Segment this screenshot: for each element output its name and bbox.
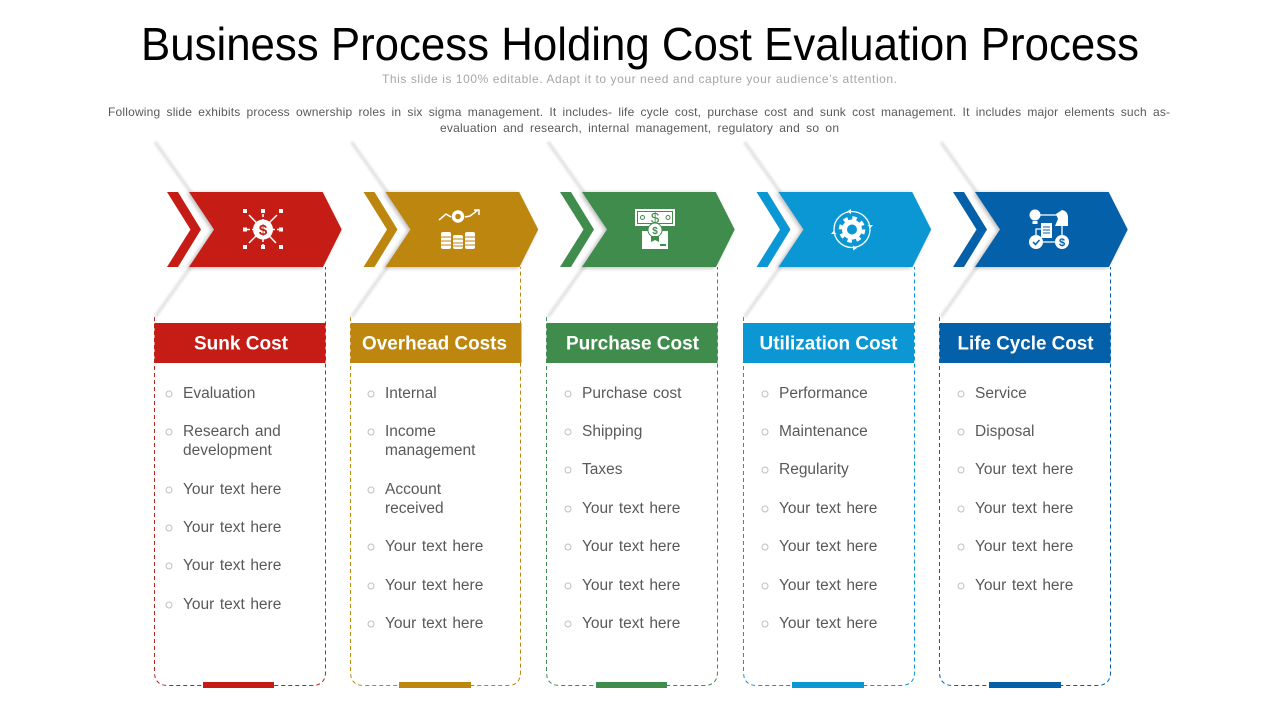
list: Life Cycle Cost items: Your text here bbox=[975, 538, 1073, 555]
list: Sunk Cost items: Evaluation bbox=[183, 385, 255, 402]
list: Purchase Cost items: Taxes bbox=[582, 461, 623, 478]
list: Purchase Cost items bbox=[565, 385, 682, 632]
subtitle: This slide is 100% editable. Adapt it to your need and capture your audience’s attention. bbox=[382, 72, 897, 86]
icon: banknote and box: $ bbox=[651, 210, 660, 227]
list: Utilization Cost items: Your text here bbox=[779, 577, 877, 594]
list: Purchase Cost items: Your text here bbox=[582, 500, 680, 517]
description bbox=[108, 105, 1170, 135]
list: Life Cycle Cost items: Your text here bbox=[975, 500, 1073, 517]
list: Overhead Costs items: management bbox=[385, 442, 476, 459]
header: Sunk Cost bbox=[154, 323, 326, 363]
icon: gear and coins bbox=[439, 210, 479, 249]
list: Purchase Cost items: Your text here bbox=[582, 577, 680, 594]
list: Overhead Costs items: Your text here bbox=[385, 538, 483, 555]
arrow banner bbox=[548, 142, 735, 317]
arrow banner bbox=[155, 142, 342, 317]
footer bar bbox=[203, 682, 274, 688]
list: Life Cycle Cost items: Your text here bbox=[975, 461, 1073, 478]
footer bar bbox=[792, 682, 864, 688]
arrow banner bbox=[352, 142, 538, 317]
list: Sunk Cost items bbox=[166, 385, 281, 613]
header: Utilization Cost: Utilization Cost bbox=[760, 334, 898, 354]
list: Overhead Costs items: Internal bbox=[385, 385, 437, 402]
list: Sunk Cost items: Your text here bbox=[183, 557, 281, 574]
list: Overhead Costs items: Account bbox=[385, 481, 442, 498]
dashed panel outline bbox=[546, 267, 718, 686]
icon: banknote and box: $ bbox=[652, 226, 658, 237]
list: Utilization Cost items: Your text here bbox=[779, 500, 877, 517]
list: Overhead Costs items: Your text here bbox=[385, 615, 483, 632]
header: Life Cycle Cost bbox=[940, 323, 1110, 363]
icon: banknote and box bbox=[635, 209, 675, 249]
description: Following slide exhibits process ownership roles in six sigma management. It includes- life cycle cost, purchase cost and sunk cost management. It includes major elements such as- bbox=[108, 105, 1170, 119]
arrow banner bbox=[941, 142, 1128, 317]
dashed panel outline bbox=[940, 267, 1110, 686]
list: Sunk Cost items: Your text here bbox=[183, 519, 281, 536]
icon: dollar network bbox=[243, 209, 283, 249]
list: Utilization Cost items: Regularity bbox=[779, 461, 849, 478]
header: Overhead Costs: Overhead Costs bbox=[362, 334, 507, 354]
icon: dollar network: $ bbox=[259, 222, 268, 239]
column: Life Cycle Cost bbox=[940, 142, 1128, 688]
list: Life Cycle Cost items: Service bbox=[975, 385, 1027, 402]
list: Overhead Costs items bbox=[368, 385, 483, 632]
list: Sunk Cost items: Your text here bbox=[183, 596, 281, 613]
list: Purchase Cost items: Your text here bbox=[582, 615, 680, 632]
column: Utilization Cost bbox=[743, 142, 931, 688]
footer bar bbox=[989, 682, 1061, 688]
footer bar bbox=[399, 682, 471, 688]
list: Utilization Cost items bbox=[762, 385, 877, 632]
list: Sunk Cost items: development bbox=[183, 442, 272, 459]
icon: gear cycle bbox=[831, 209, 873, 250]
description: evaluation and research, internal management, regulatory and so on bbox=[440, 121, 839, 135]
dashed panel outline bbox=[154, 267, 326, 686]
list: Purchase Cost items: Shipping bbox=[582, 423, 642, 440]
list: Sunk Cost items: Your text here bbox=[183, 481, 281, 498]
header: Utilization Cost bbox=[743, 323, 914, 363]
list: Life Cycle Cost items: Your text here bbox=[975, 577, 1073, 594]
header: Life Cycle Cost: Life Cycle Cost bbox=[958, 334, 1094, 354]
header: Purchase Cost bbox=[546, 323, 718, 363]
dashed panel outline bbox=[744, 267, 914, 686]
footer bar bbox=[596, 682, 667, 688]
list: Overhead Costs items: Income bbox=[385, 423, 436, 440]
header: Purchase Cost: Purchase Cost bbox=[566, 334, 700, 354]
list: Utilization Cost items: Performance bbox=[779, 385, 868, 402]
title: Business Process Holding Cost Evaluation Process bbox=[141, 18, 1139, 70]
list: Utilization Cost items: Your text here bbox=[779, 615, 877, 632]
list: Life Cycle Cost items bbox=[958, 385, 1073, 594]
column: Sunk Cost bbox=[154, 142, 342, 688]
list: Overhead Costs items: Your text here bbox=[385, 577, 483, 594]
list: Purchase Cost items: Purchase cost bbox=[582, 385, 682, 402]
list: Utilization Cost items: Maintenance bbox=[779, 423, 868, 440]
list: Life Cycle Cost items: Disposal bbox=[975, 423, 1034, 440]
list: Utilization Cost items: Your text here bbox=[779, 538, 877, 555]
header: Overhead Costs bbox=[350, 323, 522, 363]
icon: strategy network: $ bbox=[1059, 237, 1065, 249]
column: Purchase Cost bbox=[546, 142, 735, 688]
arrow banner bbox=[744, 142, 931, 317]
header: Sunk Cost: Sunk Cost bbox=[194, 334, 289, 354]
column: Overhead Costs bbox=[350, 142, 538, 688]
list: Purchase Cost items: Your text here bbox=[582, 538, 680, 555]
icon: strategy network bbox=[1029, 210, 1069, 249]
dashed panel outline bbox=[350, 267, 520, 686]
list: Overhead Costs items: received bbox=[385, 500, 444, 517]
list: Sunk Cost items: Research and bbox=[183, 423, 281, 440]
